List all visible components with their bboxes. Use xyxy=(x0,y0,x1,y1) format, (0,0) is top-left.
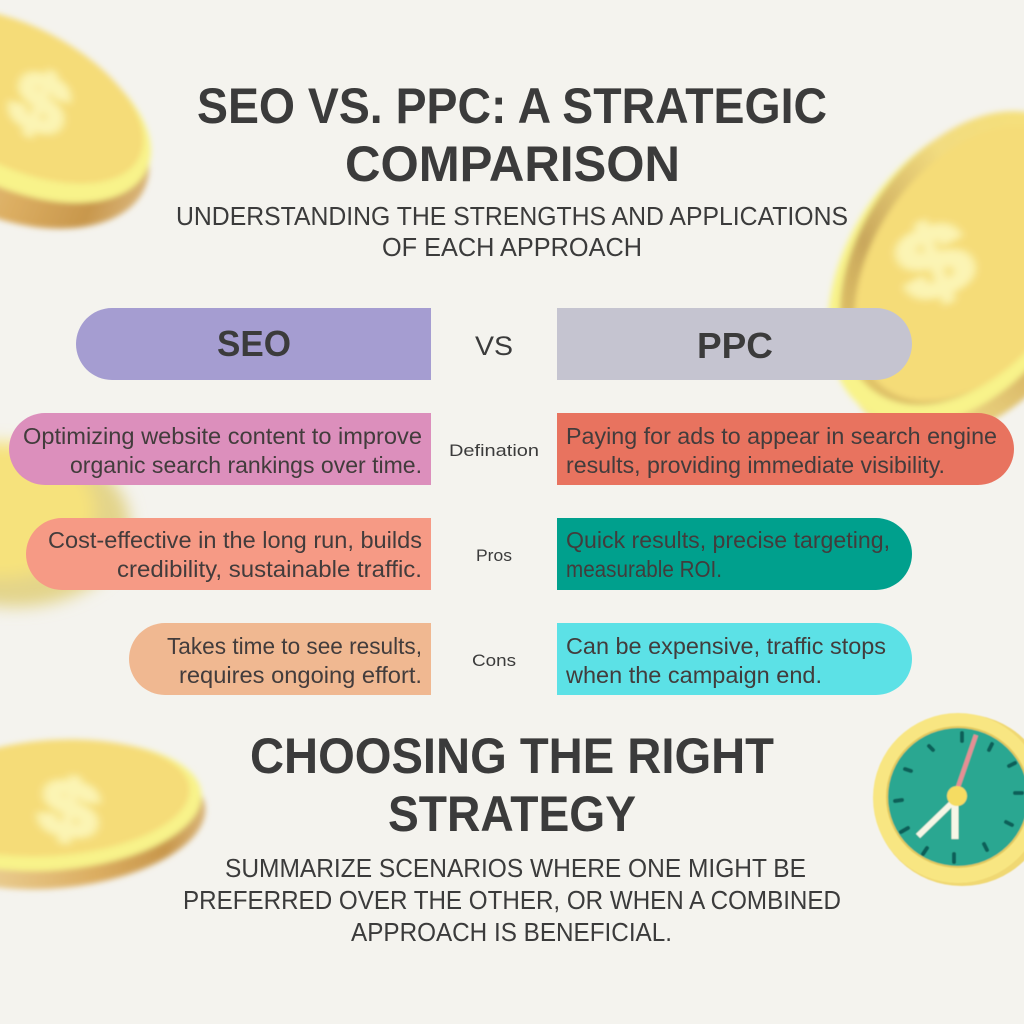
panel: PPC cons xyxy=(557,623,912,695)
panel: SEO pros: credibility, sustainable traffic. xyxy=(117,556,422,582)
panel: SEO header: SEO xyxy=(217,323,291,364)
icon: clock xyxy=(873,713,1024,886)
panel: PPC definition xyxy=(557,413,1014,485)
panel: PPC pros xyxy=(557,518,912,590)
definition label: Defination xyxy=(449,441,539,460)
VS label: VS xyxy=(475,331,513,361)
subtitle: UNDERSTANDING THE STRENGTHS AND APPLICATIONS xyxy=(176,201,848,231)
summary text: APPROACH IS BENEFICIAL. xyxy=(351,917,672,947)
panel: SEO cons: Takes time to see results, xyxy=(167,633,422,659)
pros label: Pros xyxy=(476,546,512,565)
panel: SEO definition: organic search rankings over time. xyxy=(70,452,422,478)
subtitle: OF EACH APPROACH xyxy=(382,232,642,262)
panel: PPC header: PPC xyxy=(697,325,773,366)
panel: SEO pros xyxy=(26,518,431,590)
icon: coin top left xyxy=(0,0,180,266)
heading: choosing the right strategy xyxy=(250,728,774,842)
panel: PPC cons: Can be expensive, traffic stops xyxy=(566,633,886,659)
panel: SEO cons xyxy=(129,623,431,695)
panel: SEO pros: Cost-effective in the long run, builds xyxy=(48,527,422,553)
summary text: PREFERRED OVER THE OTHER, OR WHEN A COMBINED xyxy=(183,885,841,915)
panel: SEO cons: requires ongoing effort. xyxy=(179,662,422,688)
icon: coin right xyxy=(772,64,1024,489)
icon: coin bottom left xyxy=(0,730,212,903)
panel: PPC header xyxy=(557,308,912,380)
icon: blurred coin middle left xyxy=(0,442,130,607)
title: COMPARISON xyxy=(345,136,680,192)
title xyxy=(197,78,827,192)
cons label: Cons xyxy=(472,651,516,670)
panel: PPC pros: Quick results, precise targeting, xyxy=(566,527,890,553)
panel: SEO definition xyxy=(9,413,431,485)
heading: choosing the right strategy: STRATEGY xyxy=(388,786,636,842)
title: SEO VS. PPC: A STRATEGIC xyxy=(197,78,827,134)
panel: PPC pros: measurable ROI. xyxy=(566,556,722,582)
icon: coin bottom left: $ xyxy=(33,760,106,857)
icon: coin right: $ xyxy=(881,196,987,326)
panel: SEO definition: Optimizing website content to improve xyxy=(23,423,422,449)
summary text xyxy=(183,853,841,947)
subtitle xyxy=(176,201,848,262)
panel: SEO header xyxy=(76,308,431,380)
panel: PPC cons: when the campaign end. xyxy=(565,662,822,688)
summary text: SUMMARIZE SCENARIOS WHERE ONE MIGHT BE xyxy=(225,853,806,883)
panel: PPC definition: results, providing immediate visibility. xyxy=(566,452,945,478)
panel: PPC definition: Paying for ads to appear in search engine xyxy=(566,423,997,449)
heading: choosing the right strategy: CHOOSING THE RIGHT xyxy=(250,728,774,784)
